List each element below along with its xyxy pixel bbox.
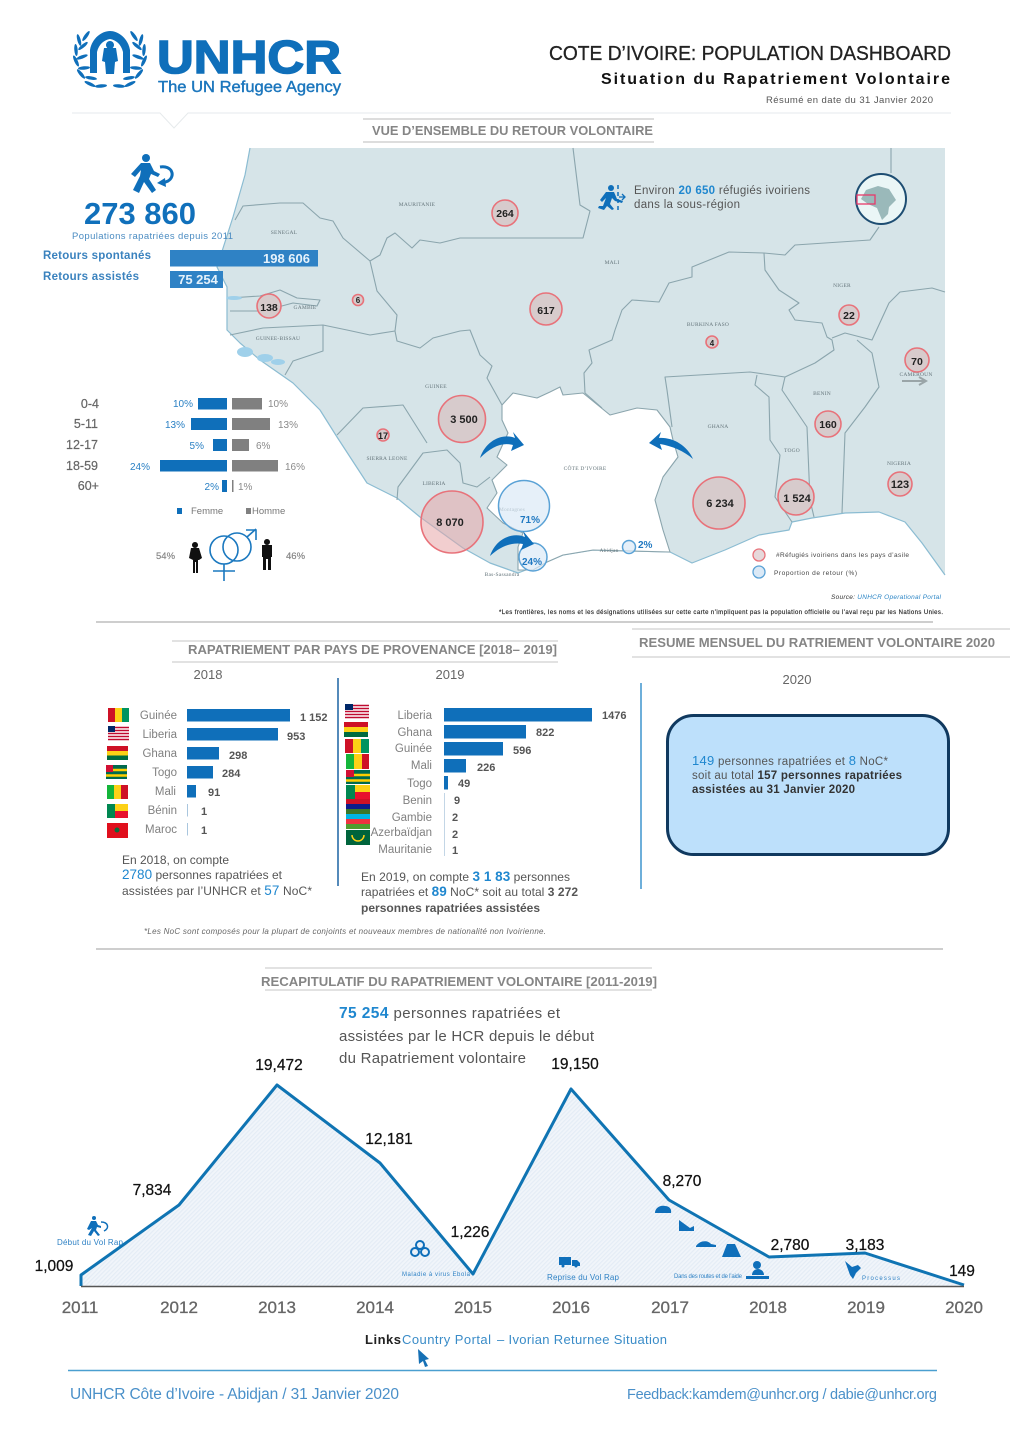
year axis labels: 2012 [160,1298,198,1317]
country labels: MAURITANIE [399,202,436,208]
subtitle: Situation du Rapatriement Volontaire [601,71,950,88]
panel: total returns [43,154,318,288]
country labels 2018: Liberia [142,729,178,741]
icons: natural hazards and road: Dans des routes et de l’aide [674,1274,743,1280]
country borders [230,148,945,522]
bar: assisted returns: 75 254 [178,272,219,287]
data labels: 1,226 [451,1224,489,1241]
country labels: CAMEROUN [899,372,933,378]
logo wordmark: UNHCR [157,31,341,83]
values 2019: 2 [452,812,458,824]
data labels: 19,472 [255,1057,303,1074]
age labels: 18-59 [66,459,98,473]
text: recap intro: du Rapatriement volontaire [339,1050,526,1067]
bubble values: 8 070 [436,517,464,529]
chart: age and sex pyramid [66,397,306,581]
male share: 46% [286,551,306,562]
year axis labels: 2016 [552,1298,590,1317]
values 2019: 596 [513,745,531,757]
icon: UNHCR emblem [72,30,148,88]
divider lines [96,621,933,623]
values 2019: 1 [452,845,458,857]
column separators [337,678,339,886]
date line: Résumé en date du 31 Janvier 2020 [766,95,933,106]
country labels: GUINEE [425,384,447,390]
icon: gender symbols [210,529,256,581]
bubble values: 138 [260,302,278,314]
flags 2019 [344,704,370,845]
year axis labels: 2017 [651,1298,689,1317]
year heading 2018: 2018 [194,667,222,682]
return share values: 24% [522,557,542,568]
age labels: 5-11 [74,417,98,431]
country labels 2019: Guinée [395,743,432,755]
age labels: 12-17 [66,438,98,452]
icon: refugees crossing border [598,185,625,210]
icon: start of voluntary return [57,1216,124,1247]
map disclaimer: *Les frontières, les noms et les désignations utilisées sur cette carte n’impliquent pas la population officielle ou l’aval reçu par les Nations Unies. [499,610,943,616]
country labels 2018: Ghana [142,748,178,760]
callout: January 2020 summary [668,716,948,854]
values 2019: 49 [458,778,470,790]
total figure: 273 860 [84,196,196,231]
icon: cursor [418,1349,429,1367]
year axis labels: 2013 [258,1298,296,1317]
male percentages: 6% [256,441,271,452]
chart: 2019 returns by country [344,704,626,857]
map legend [753,549,909,578]
icon: dove of peace: Processus [862,1276,900,1282]
bubble values: 6 234 [706,498,735,510]
country labels 2019: Mauritanie [378,844,432,856]
country labels 2018: Bénin [148,805,177,817]
values 2019: 1476 [602,710,626,722]
age labels [66,397,99,493]
footer rule [68,1370,937,1372]
legend: female / male [177,506,285,517]
values 2019: 2 [452,829,458,841]
coastal islands [226,296,285,365]
values 2019: 9 [454,795,460,807]
country labels 2019: Ghana [397,727,433,739]
male percentages: 10% [268,399,288,410]
bubble values: 1 524 [783,493,812,505]
text: 2019 summary: personnes rapatriées assistées [361,901,540,915]
callout: January 2020 summary: assistées au 31 Janvier 2020 [692,784,855,796]
male percentages: 16% [285,462,305,473]
country labels: SIERRA LEONE [366,456,408,462]
age labels: 60+ [78,479,99,493]
heading: overview [363,119,654,142]
country labels 2018 [140,710,178,836]
bars 2019 [444,708,592,856]
bubble values: 6 [356,296,361,305]
bar: spontaneous returns: 198 606 [263,251,310,266]
country labels: Montagnes [499,507,525,513]
footnote: *Les NoC sont composés pour la plupart de conjoints et nouveaux membres de nationalité non Ivoirienne. [144,927,546,936]
chart: 2018 returns by country [106,708,328,838]
Côte d'Ivoire territory [487,387,678,570]
year axis labels: 2019 [847,1298,885,1317]
heading: recap: RECAPITULATIF DU RAPATRIEMENT VOLONTAIRE [2011-2019] [261,975,657,989]
heading: recap [261,968,657,990]
trend line [81,1085,964,1286]
proportional circles: refugees by asylum country [257,200,929,553]
logo tagline: The UN Refugee Agency [158,79,341,96]
country labels 2018: Togo [152,767,177,779]
map legend: #Réfugiés ivoiriens dans les pays d’asile [776,552,909,559]
links: Links [365,1332,401,1347]
icon: truck, resumption [547,1257,620,1282]
heading: monthly summary [632,629,1010,657]
male percentages: 1% [238,482,253,493]
icon: man [262,539,272,570]
year axis labels: 2011 [62,1298,98,1317]
country labels: BENIN [813,391,831,397]
map legend: Proportion de retour (%) [774,570,857,577]
baseline [81,1286,964,1288]
country labels 2019: Benin [403,795,432,807]
icon: Ebola: Maladie à virus Ebola [402,1272,471,1278]
male percentages [238,399,305,493]
icon: Ebola [402,1241,471,1278]
map land [217,148,945,575]
heading: monthly summary: RESUME MENSUEL DU RATRIEMENT VOLONTAIRE 2020 [639,636,995,650]
country labels: LIBERIA [422,481,446,487]
country labels: SENEGAL [271,230,298,236]
female percentages: 5% [190,441,204,452]
divider [96,948,943,950]
values 2019 [452,710,626,857]
values 2018: 91 [208,787,220,799]
values 2018: 1 152 [300,712,328,724]
data labels [35,1056,975,1280]
data labels: 1,009 [35,1258,73,1275]
links: – Ivorian Returnee Situation [497,1332,667,1347]
bars 2018 [187,709,290,836]
country labels 2019: Gambie [392,812,432,824]
icons: natural hazards and road [655,1206,769,1280]
country labels [256,202,933,578]
arrows into Côte d'Ivoire [480,432,693,556]
female percentages [130,399,219,493]
female percentages: 24% [130,462,150,473]
heading: repatriation by country: RAPATRIEMENT PAR PAYS DE PROVENANCE [2018– 2019] [188,643,557,657]
country labels 2019: Mali [411,760,432,772]
female percentages: 2% [205,482,219,493]
text: recap intro: assistées par le HCR depuis le début [339,1028,595,1045]
year axis labels: 2015 [454,1298,492,1317]
year axis labels: 2020 [945,1298,983,1317]
return share values: 71% [520,515,540,526]
year axis labels: 2014 [356,1298,394,1317]
bubble values: 160 [819,419,837,431]
header: UNHCR logo [72,30,341,96]
data labels: 3,183 [846,1237,884,1254]
country labels: GUINEE-BISSAU [256,336,300,342]
values 2018: 284 [222,768,241,780]
arrow: towards Cameroon [902,377,926,385]
header rule with chevron [72,113,951,128]
values 2019: 226 [477,762,495,774]
country labels 2019: Azerbaïdjan [371,827,432,839]
legend: female / male: Femme [191,506,223,517]
male percentages: 13% [278,420,298,431]
total caption: Populations rapatriées depuis 2011 [72,231,233,242]
data labels: 7,834 [133,1182,172,1199]
data labels: 2,780 [771,1237,810,1254]
map source: Source: UNHCR Operational Portal [831,594,942,601]
bubble values: 3 500 [450,414,478,426]
bubble values: 17 [378,431,388,441]
callout: refugees in sub-region: Environ 20 650 réfugiés ivoiriens [634,185,810,197]
female percentages: 10% [173,399,193,410]
male bars [232,398,278,492]
age labels: 0-4 [81,397,99,411]
bubble values: 70 [911,356,923,368]
heading: repatriation by country [172,641,558,662]
data labels: 8,270 [663,1173,702,1190]
female share: 54% [156,551,176,562]
icon: dove of peace [845,1261,900,1282]
text: 2018 summary: assistées par l’UNHCR et 57 NoC* [122,883,312,898]
data labels: 149 [949,1263,975,1280]
coastline [217,148,945,575]
country labels 2019: Togo [407,778,432,790]
bubble values: 123 [891,479,909,491]
label: assisted returns: Retours assistés [43,271,139,283]
country labels: BURKINA FASO [687,322,729,328]
country labels 2018: Mali [155,786,176,798]
bar: spontaneous returns [170,250,318,266]
country labels: NIGERIA [887,461,911,467]
flags 2018 [106,708,129,838]
country labels 2019: Liberia [397,710,433,722]
icon: truck, resumption: Reprise du Vol Rap [547,1273,620,1282]
country labels: TOGO [784,448,800,454]
values 2018: 298 [229,750,247,762]
callout: refugees in sub-region: dans la sous-région [634,199,740,211]
icon: returning person [131,154,172,193]
country labels: Bas-Sassandra [485,572,520,578]
bubble values: 22 [843,310,855,322]
values 2018: 1 [201,825,207,837]
chart: annual returns area chart [35,1056,983,1317]
heading: overview: VUE D’ENSEMBLE DU RETOUR VOLONTAIRE [372,124,653,138]
icon: start of voluntary return: Début du Vol Rap [57,1238,124,1247]
bubble values: 617 [537,305,555,317]
label: spontaneous returns: Retours spontanés [43,250,151,262]
text: 2018 summary: 2780 personnes rapatriées et [122,867,282,882]
text: 2019 summary: rapatriées et 89 NoC* soit au total 3 272 [361,884,578,899]
year axis labels: 2018 [749,1298,787,1317]
links: Country Portal [402,1332,491,1347]
values 2018: 1 [201,806,207,818]
country labels 2018: Guinée [140,710,177,722]
bar: assisted returns [170,271,223,288]
footer: office and date: UNHCR Côte d’Ivoire - Abidjan / 31 Janvier 2020 [70,1386,399,1403]
return share values: 2% [638,540,653,551]
country labels: CÔTE D’IVOIRE [564,464,607,472]
return share values [520,515,653,568]
country labels 2019 [371,710,433,856]
footer: feedback contacts: Feedback:kamdem@unhcr.org / dabie@unhcr.org [627,1387,937,1403]
country labels: MALI [605,260,619,266]
country labels: GAMBIE [294,305,317,311]
country labels: GHANA [708,424,728,430]
bubble values: 264 [496,208,514,220]
year axis labels [62,1298,983,1317]
values 2018: 953 [287,731,305,743]
values 2018 [201,712,328,837]
bubble values [260,208,923,529]
data labels: 12,181 [365,1131,413,1148]
text: 2018 summary: En 2018, on compte [122,853,229,867]
legend: female / male: Homme [252,506,285,517]
text: recap intro: 75 254 personnes rapatriées et [339,1005,560,1022]
year heading 2020: 2020 [783,672,811,687]
country labels: NIGER [833,283,851,289]
proportional circles: return share [498,480,636,571]
panel: map of West Africa [217,148,945,578]
female bars [160,398,227,492]
country labels: Abidjan [599,548,619,554]
icon: woman [189,542,202,573]
values 2019: 822 [536,727,554,739]
area fill [81,1085,964,1286]
country labels 2018: Maroc [145,824,177,836]
year heading 2019: 2019 [436,667,464,682]
callout: January 2020 summary: 149 personnes rapatriées et 8 NoC* [692,753,888,768]
callout: January 2020 summary: soit au total 157 personnes rapatriées [692,770,902,782]
bubble values: 4 [710,339,715,348]
title: COTE D’IVOIRE: POPULATION DASHBOARD [549,43,951,65]
text: 2019 summary: En 2019, on compte 3 1 83 personnes [361,869,570,884]
female percentages: 13% [165,420,185,431]
icon: globe locator [856,174,906,224]
data labels: 19,150 [551,1056,599,1073]
